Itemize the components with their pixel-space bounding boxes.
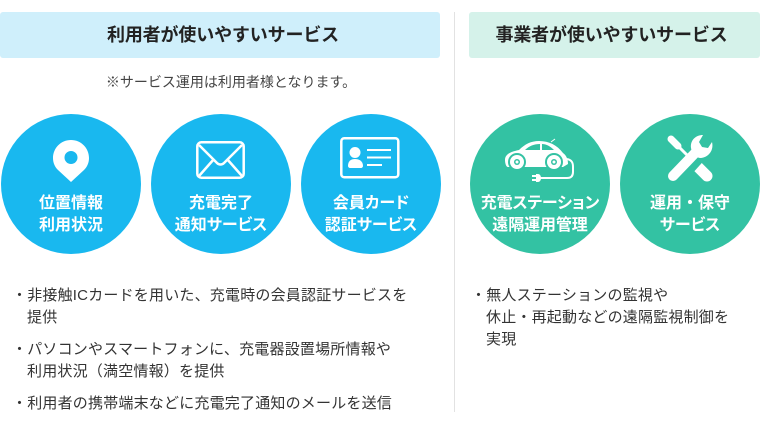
label: 会員カード bbox=[333, 195, 409, 212]
text block: user service list bbox=[12, 287, 407, 412]
label: 利用状況 bbox=[39, 217, 103, 234]
label: 充電完了 bbox=[189, 195, 253, 212]
icon: wrench and screwdriver bbox=[668, 135, 712, 182]
label bbox=[175, 194, 267, 234]
text block: user service list: 利用状況（満空情報）を提供 bbox=[27, 363, 225, 380]
panel: remote station management circle bbox=[470, 114, 610, 254]
text block: user service list: ・利用者の携帯端末などに充電完了通知のメールを送信 bbox=[12, 395, 392, 412]
label: 認証サービス bbox=[325, 217, 417, 234]
text block: user service list: ・パソコンやスマートフォンに、充電器設置場所情報や bbox=[12, 341, 391, 358]
label bbox=[481, 194, 599, 234]
label: 遠隔運用管理 bbox=[492, 217, 588, 234]
icon: map pin bbox=[53, 140, 89, 182]
panel: charge complete notification circle bbox=[151, 114, 291, 254]
heading: operator services bbox=[469, 12, 760, 58]
label: 充電ステーション bbox=[481, 195, 599, 212]
label: 位置情報 bbox=[39, 195, 103, 212]
heading: user services: 利用者が使いやすいサービス bbox=[107, 25, 339, 45]
heading: user services bbox=[0, 12, 440, 58]
label: 通知サービス bbox=[175, 217, 267, 234]
text block: operator service list: 休止・再起動などの遠隔監視制御を bbox=[486, 309, 729, 326]
text block: operator service list: ・無人ステーションの監視や bbox=[471, 287, 668, 304]
icon: electric car with plug bbox=[505, 138, 574, 182]
heading: operator services: 事業者が使いやすいサービス bbox=[495, 25, 728, 45]
text block: user service list: ・非接触ICカードを用いた、充電時の会員認証サービスを bbox=[12, 287, 407, 304]
note: ※サービス運用は利用者様となります。 bbox=[106, 74, 356, 90]
text block: operator service list: 実現 bbox=[486, 331, 516, 348]
label: 運用・保守 bbox=[650, 195, 730, 212]
label: サービス bbox=[660, 217, 720, 234]
icon: member card bbox=[340, 137, 400, 178]
text block: user service list: 提供 bbox=[27, 309, 57, 326]
label bbox=[325, 194, 417, 234]
panel: member card authentication circle bbox=[301, 114, 441, 254]
panel: operation and maintenance circle bbox=[620, 114, 760, 254]
label bbox=[39, 194, 103, 234]
text block: operator service list bbox=[471, 287, 729, 348]
icon: envelope bbox=[196, 141, 245, 179]
panel: location info circle bbox=[1, 114, 141, 254]
label bbox=[650, 194, 730, 234]
